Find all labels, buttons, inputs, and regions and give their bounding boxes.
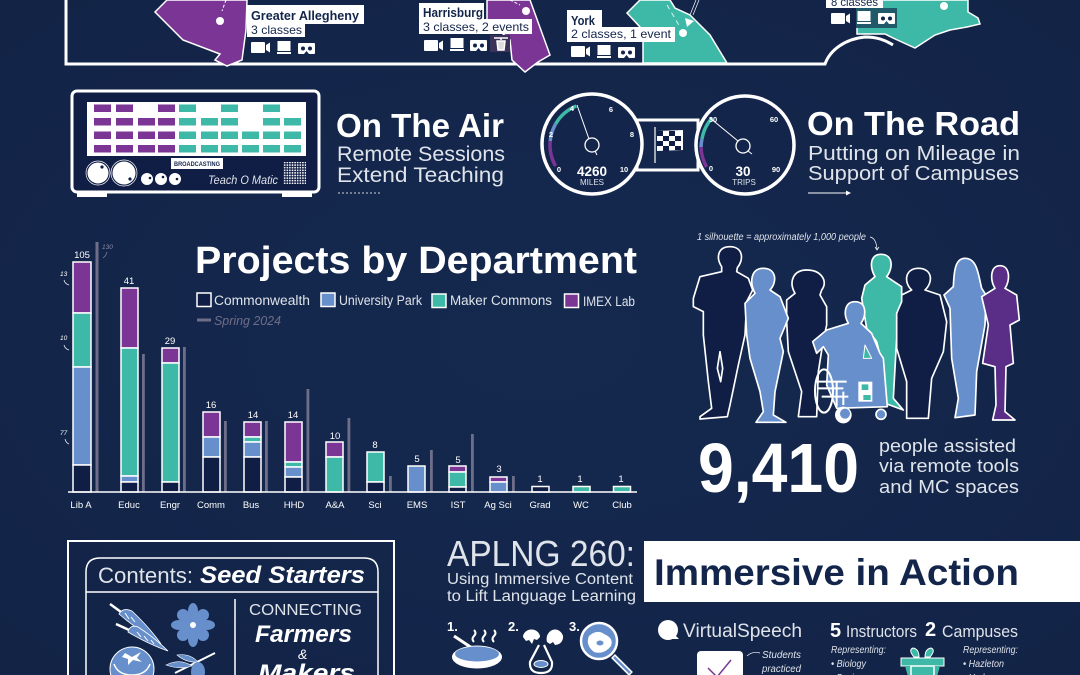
person 2: [745, 268, 788, 422]
side annotations: 10: [60, 335, 68, 342]
person 3: [787, 270, 827, 417]
stat: instructors: Instructors: [846, 623, 917, 641]
category labels: Bus: [243, 500, 259, 511]
icon: podium: [901, 648, 944, 675]
heading: APLNG 260: to Lift Language Learning: [447, 588, 636, 605]
stat: instructors: Representing:: [831, 645, 886, 656]
value labels: 14: [248, 410, 258, 421]
value labels: [74, 250, 624, 485]
stat: campuses: • Hazleton: [963, 659, 1004, 670]
label: Greater Allegheny: [247, 5, 364, 54]
heading: contents: Seed Starters: [200, 562, 365, 589]
panel: VirtualSpeech: [658, 620, 802, 675]
radio knobs: [86, 160, 180, 186]
bar chart: projects by department: [60, 242, 637, 511]
value labels: 14: [288, 410, 298, 421]
label: York: [567, 10, 675, 61]
gauge: miles: 8: [630, 130, 634, 139]
map region: Greater Allegheny: [155, 0, 247, 66]
category labels: Lib A: [70, 500, 92, 511]
value labels: 1: [618, 474, 624, 485]
heading: On The Air: Extend Teaching: [337, 164, 504, 187]
heading: contents: Contents:: [98, 563, 193, 588]
map frame: [66, 0, 893, 64]
heading: On The Air: Remote Sessions: [337, 143, 505, 166]
stat: instructors: [830, 620, 917, 675]
panel: seed starters crate: [68, 541, 394, 675]
gauge: miles: 6: [609, 105, 613, 114]
heading: APLNG 260: Using Immersive Content: [447, 571, 634, 588]
person 1: [693, 247, 753, 419]
category labels: EMS: [407, 500, 427, 511]
gauge: trips: 90: [772, 165, 780, 174]
broadcasting light: [171, 158, 223, 169]
category labels: [70, 500, 632, 511]
gauge: miles: 4260: [577, 164, 607, 179]
step 2 egg and flask: [508, 619, 563, 673]
gauge: miles: MILES: [580, 178, 604, 187]
checkered flag: [655, 127, 683, 163]
heading: APLNG 260: APLNG 260:: [447, 533, 635, 574]
label: Harrisburg: Harrisburg: [423, 6, 483, 20]
heading: APLNG 260: [447, 533, 636, 605]
value labels: 10: [330, 431, 340, 442]
person 7: [944, 258, 986, 418]
heading: Projects by Department: Projects by Department: [195, 240, 637, 282]
side annotations: 130: [102, 244, 113, 251]
broadcasting light: BROADCASTING: [174, 162, 220, 168]
value labels: 5: [414, 454, 420, 465]
chart legend: [197, 293, 635, 328]
map region: Harrisburg: [487, 0, 550, 72]
icon: tomato: [110, 647, 154, 675]
category labels: IST: [451, 500, 466, 511]
silhouettes: people assisted: [693, 247, 1019, 423]
heading: VirtualSpeech: [683, 621, 802, 642]
gauge: miles: 4: [570, 104, 575, 113]
category labels: Educ: [118, 500, 140, 511]
panel: instructors and campuses: [830, 619, 1018, 675]
banner: Immersive in Action: [644, 541, 1080, 602]
silhouette note: 1 silhouette = approximately 1,000 people: [697, 232, 866, 243]
value labels: 5: [455, 455, 461, 466]
gauge: trips: 0: [709, 164, 713, 173]
text: connecting farmers and makers: CONNECTING: [249, 602, 362, 619]
stat: people assisted: [698, 429, 1019, 507]
value labels: 1: [537, 474, 543, 485]
value labels: 1: [577, 474, 583, 485]
gauge: miles: 2: [549, 130, 553, 139]
panel: On The Road gauges: [542, 94, 794, 194]
category labels: Club: [612, 500, 632, 511]
value labels: 3: [496, 464, 502, 475]
checkbox card: [697, 651, 743, 675]
stat: instructors: 5: [830, 620, 841, 642]
stat: instructors: • Biology: [831, 659, 867, 670]
value labels: 29: [165, 336, 175, 347]
gauge connector: [637, 120, 698, 170]
map dots and routes: [216, 0, 948, 37]
label: Harrisburg: 3 classes, 2 events: [423, 20, 529, 34]
map region: York: [627, 0, 727, 63]
heading: On The Road: [807, 105, 1020, 196]
category labels: A&A: [325, 500, 345, 511]
map region: eastern campus: [857, 0, 980, 48]
radio feet: [77, 192, 312, 197]
icon: carrots: [110, 604, 168, 651]
crate label frame: [86, 558, 378, 675]
heading: On The Road: On The Road: [807, 105, 1020, 142]
text: connecting farmers and makers: [249, 602, 362, 675]
chart legend: Commonwealth: [214, 293, 310, 308]
radio equalizer screen: [87, 102, 306, 156]
note: Students: [762, 650, 801, 661]
stat: people assisted: people assisted: [879, 435, 1016, 456]
category labels: Engr: [160, 500, 180, 511]
icon: flower: [171, 603, 215, 647]
label: Harrisburg: [419, 3, 532, 52]
person 5: [862, 254, 903, 410]
category labels: HHD: [284, 500, 304, 511]
gauge: trips: TRIPS: [732, 178, 756, 187]
text: connecting farmers and makers: Farmers: [255, 621, 352, 648]
panel: campus map: [66, 0, 980, 72]
chart baseline: [68, 491, 637, 493]
stat: people assisted: and MC spaces: [879, 476, 1019, 497]
label: York: York: [571, 14, 595, 28]
label: eastern campus: [826, 0, 897, 28]
stat: campuses: Representing:: [963, 645, 1018, 656]
heading: contents: [98, 562, 365, 589]
category labels: WC: [573, 500, 589, 511]
gauge: miles: 0: [557, 165, 561, 174]
side annotations: 77: [60, 430, 68, 437]
stat: campuses: Campuses: [942, 623, 1018, 641]
gauge: trips: 30: [709, 115, 717, 124]
value labels: 16: [206, 400, 216, 411]
label: Greater Allegheny: 3 classes: [251, 23, 302, 37]
speaker grille: [283, 162, 306, 184]
category labels: Comm: [197, 500, 225, 511]
heading: On The Air: On The Air: [336, 107, 504, 144]
panel: On The Air radio: [72, 91, 319, 197]
person 4: wheelchair user: [813, 302, 887, 423]
note: practiced: [761, 664, 801, 675]
value labels: 105: [74, 250, 90, 261]
icon steps: cooking an egg: [447, 619, 631, 674]
label: York: 2 classes, 1 event: [571, 27, 672, 41]
chart legend: IMEX Lab: [583, 294, 635, 309]
note: [747, 650, 801, 675]
step 1 pan: [447, 619, 502, 668]
gauge: trips: 60: [770, 115, 778, 124]
heading: On The Road: Support of Campuses: [808, 163, 1019, 185]
person 6: [897, 268, 947, 418]
stat: people assisted: 9,410: [698, 429, 859, 507]
step 1 pan: 1.: [447, 619, 458, 634]
bar segments: [73, 262, 630, 492]
radio body: [72, 91, 319, 192]
icon: speech bubble: [658, 620, 679, 640]
silhouette note: [697, 232, 879, 250]
stat: campuses: 2: [925, 619, 936, 641]
category labels: Sci: [368, 500, 382, 511]
person 8: [982, 266, 1019, 420]
category labels: Grad: [529, 500, 551, 511]
gauge: trips: [696, 96, 794, 194]
step 3 magnifier: 3.: [569, 619, 580, 634]
value labels: 8: [372, 440, 378, 451]
chart legend: Maker Commons: [450, 293, 552, 308]
value labels: 41: [124, 276, 134, 287]
banner: Immersive in Action: Immersive in Action: [654, 552, 1019, 593]
crate outer frame: [68, 541, 394, 675]
text: connecting farmers and makers: &: [298, 646, 307, 662]
heading: On The Road: Putting on Mileage in: [808, 143, 1020, 165]
chart legend: University Park: [339, 293, 422, 308]
side annotations: [60, 244, 113, 444]
gauge: miles: 10: [620, 165, 628, 174]
icon: leaves: [166, 653, 215, 675]
category labels: Ag Sci: [484, 500, 512, 511]
stat: campuses: [925, 619, 1018, 675]
Spring 2024 comparison bars: [96, 242, 515, 492]
gauge: trips: 30: [735, 164, 751, 179]
gauge: miles: [542, 94, 642, 194]
step 3 magnifier: [569, 619, 631, 674]
step 2 egg and flask: 2.: [508, 619, 519, 634]
stat: people assisted: via remote tools: [879, 455, 1019, 476]
chart legend: Spring 2024: [214, 313, 281, 328]
brand name: Teach O Matic: [208, 175, 278, 187]
label: Greater Allegheny: Greater Allegheny: [251, 8, 360, 23]
side annotations: 13: [60, 271, 68, 278]
heading: On The Air: [336, 107, 505, 193]
